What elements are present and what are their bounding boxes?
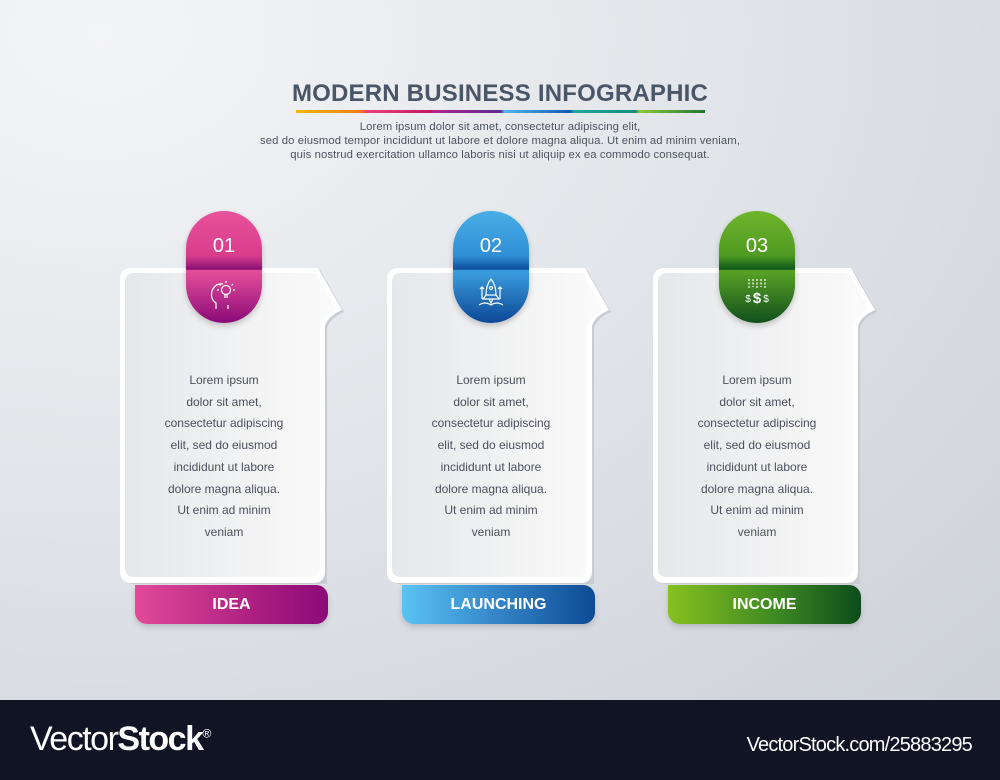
text block: Ut enim ad minim bbox=[710, 503, 804, 517]
label: LAUNCHING bbox=[402, 585, 595, 624]
footer bar bbox=[0, 700, 1000, 780]
text block: dolore magna aliqua. bbox=[435, 482, 547, 496]
text block: incididunt ut labore bbox=[174, 460, 274, 474]
text block: consectetur adipiscing bbox=[165, 416, 283, 430]
text block: dolore magna aliqua. bbox=[168, 482, 280, 496]
label: IDEA: IDEA bbox=[212, 596, 251, 613]
badge 01 bbox=[186, 211, 262, 323]
text block: consectetur adipiscing bbox=[698, 416, 816, 430]
label: INCOME: INCOME bbox=[732, 596, 796, 613]
text block: incididunt ut labore bbox=[441, 460, 541, 474]
text block: Lorem ipsum bbox=[189, 373, 259, 387]
text block: veniam bbox=[205, 525, 243, 539]
text block: dolore magna aliqua. bbox=[701, 482, 813, 496]
title underline bbox=[296, 110, 705, 113]
text block: Ut enim ad minim bbox=[444, 503, 538, 517]
subtitle text: sed do eiusmod tempor incididunt ut labore et dolore magna aliqua. Ut enim ad minim veniam, bbox=[260, 135, 740, 147]
panel: card 2 launching bbox=[387, 211, 611, 629]
text block: veniam bbox=[738, 525, 776, 539]
label: INCOME bbox=[668, 585, 861, 624]
icon: dollar arrows: $ bbox=[753, 290, 762, 307]
text block: consectetur adipiscing bbox=[432, 416, 550, 430]
text block: dolor sit amet, bbox=[453, 395, 529, 409]
text block: veniam bbox=[472, 525, 510, 539]
label: IDEA bbox=[135, 585, 328, 624]
footer url: VectorStock.com/25883295 bbox=[747, 734, 972, 756]
text block bbox=[165, 373, 283, 539]
subtitle text: Lorem ipsum dolor sit amet, consectetur adipiscing elit, bbox=[360, 121, 640, 133]
icon: head with lightbulb bbox=[210, 281, 235, 309]
text block: dolor sit amet, bbox=[719, 395, 795, 409]
text block: dolor sit amet, bbox=[186, 395, 262, 409]
text block: Lorem ipsum bbox=[722, 373, 792, 387]
footer logo: VectorStock® bbox=[30, 720, 210, 758]
text block: Lorem ipsum bbox=[456, 373, 526, 387]
text block: elit, sed do eiusmod bbox=[171, 438, 277, 452]
title: MODERN BUSINESS INFOGRAPHIC bbox=[292, 80, 708, 107]
subtitle text: quis nostrud exercitation ullamco laboris nisi ut aliquip ex ea commodo consequat. bbox=[290, 149, 710, 161]
text block bbox=[432, 373, 550, 539]
icon: dollar arrows: $ bbox=[745, 294, 751, 305]
badge 03 bbox=[719, 211, 795, 323]
label: LAUNCHING: LAUNCHING bbox=[450, 596, 546, 613]
badge 02: 02 bbox=[480, 235, 502, 257]
badge 03: 03 bbox=[746, 235, 768, 257]
panel: card 1 idea bbox=[120, 211, 344, 629]
icon: dollar arrows: $ bbox=[763, 294, 769, 305]
text block bbox=[698, 373, 816, 539]
badge 01: 01 bbox=[213, 235, 235, 257]
text block: elit, sed do eiusmod bbox=[438, 438, 544, 452]
icon: dollar arrows bbox=[745, 279, 769, 307]
icon: rocket bbox=[478, 278, 504, 306]
text block: Ut enim ad minim bbox=[177, 503, 271, 517]
panel: card 3 income bbox=[653, 211, 877, 629]
badge 02 bbox=[453, 211, 529, 323]
text block: elit, sed do eiusmod bbox=[704, 438, 810, 452]
subtitle text bbox=[260, 121, 740, 161]
text block: incididunt ut labore bbox=[707, 460, 807, 474]
